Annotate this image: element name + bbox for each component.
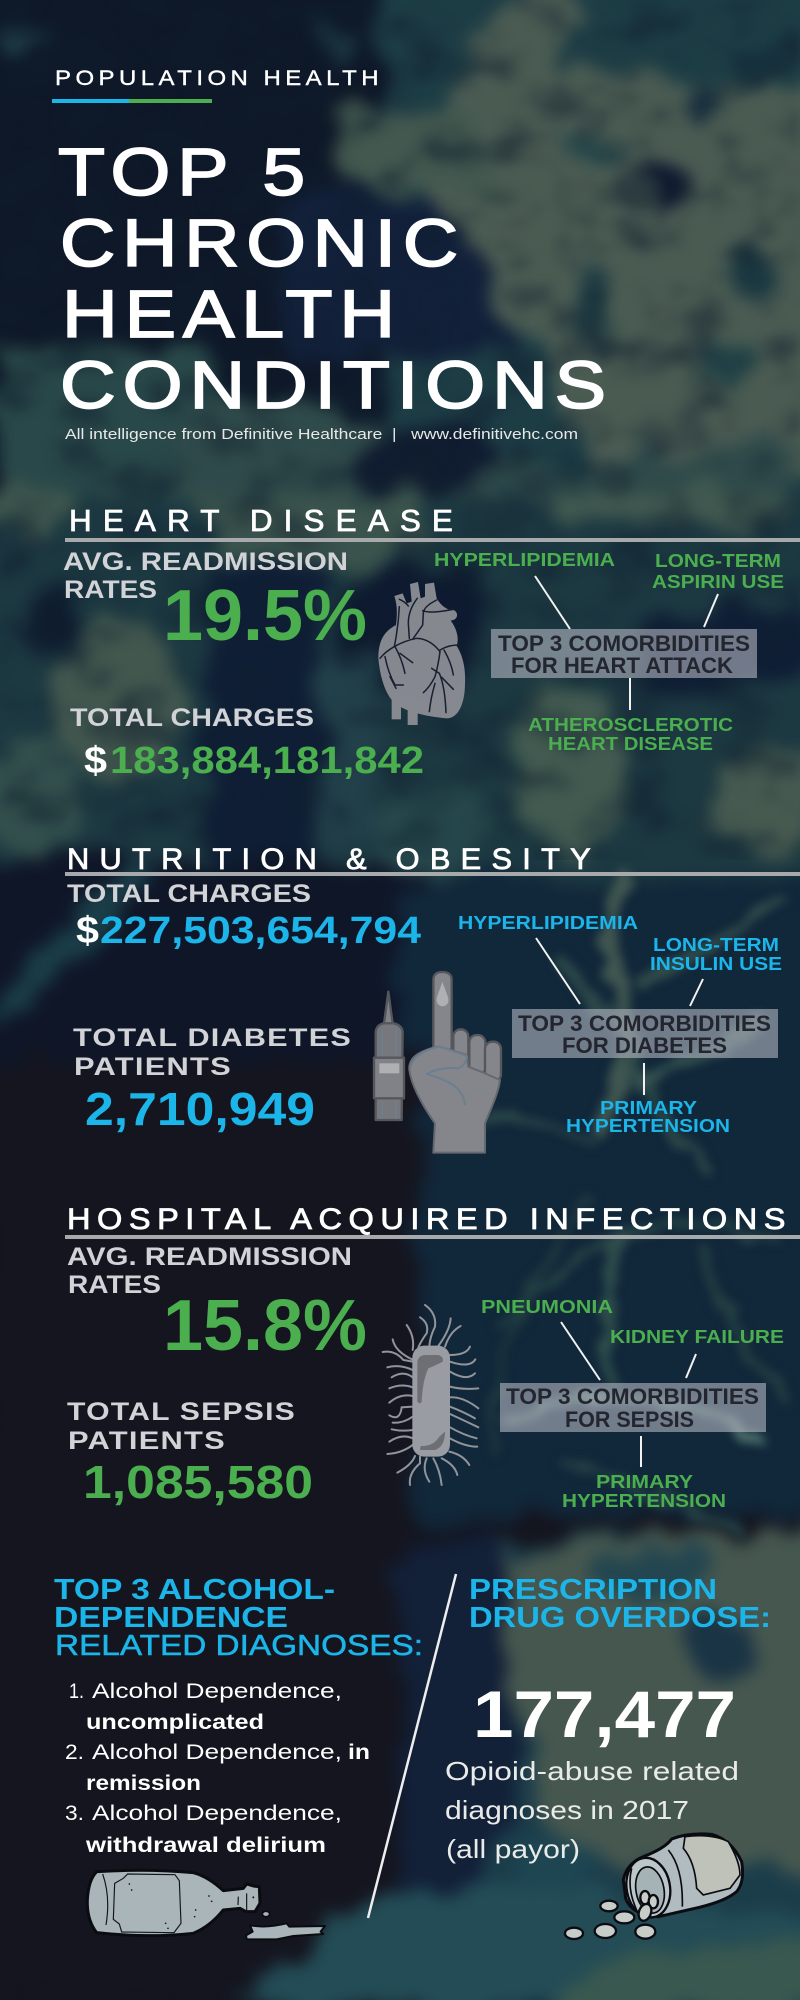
list: diagnoses: Alcohol Dependence,	[92, 1741, 342, 1764]
icon: bacterium	[383, 1305, 478, 1485]
comorbidity diagram: diabetes: HYPERLIPIDEMIA	[458, 912, 638, 933]
heading: nutrition and obesity: NUTRITION & OBESITY	[67, 843, 601, 876]
stat: total sepsis patients: TOTAL SEPSIS	[67, 1398, 296, 1426]
stat: total diabetes patients: 2,710,949	[85, 1083, 315, 1135]
comorbidity diagram: sepsis: PNEUMONIA	[481, 1296, 613, 1317]
title: CHRONIC	[60, 206, 465, 281]
top	[0, 0, 800, 1080]
list: diagnoses: 3.	[65, 1802, 84, 1825]
caption: opioid diagnoses: (all payor)	[446, 1834, 580, 1864]
comorbidity diagram: sepsis: FOR SEPSIS	[565, 1407, 694, 1432]
comorbidity diagram: sepsis: TOP 3 COMORBIDITIES	[506, 1384, 759, 1409]
list: diagnoses: 1.	[69, 1680, 84, 1703]
comorbidity diagram: sepsis: HYPERTENSION	[562, 1490, 726, 1511]
comorbidity diagram: diabetes	[458, 912, 782, 1136]
stat: total diabetes patients: TOTAL DIABETES	[73, 1024, 352, 1052]
comorbidity diagram: heart attack	[434, 549, 784, 754]
stat: total charges: TOTAL CHARGES	[70, 704, 314, 732]
list: diagnoses: withdrawal delirium	[85, 1834, 326, 1857]
comorbidity diagram: heart attack: ATHEROSCLEROTIC	[528, 714, 733, 735]
stat: average readmission rates: AVG. READMISSION	[63, 548, 348, 576]
stat: total charges: 227,503,654,794	[100, 910, 421, 952]
icon: spilled pill bottle	[565, 1834, 743, 1939]
caption: opioid diagnoses: Opioid-abuse related	[445, 1756, 739, 1786]
panel: prescription drug overdose	[445, 1574, 771, 1939]
stat: total diabetes patients: PATIENTS	[74, 1053, 232, 1081]
source line: All intelligence from Definitive Healthcare | www.definitivehc.com	[65, 427, 578, 443]
comorbidity diagram: diabetes: FOR DIABETES	[562, 1033, 727, 1058]
comorbidity diagram: heart attack: FOR HEART ATTACK	[511, 653, 733, 678]
stat: total charges: 183,884,181,842	[110, 740, 424, 782]
icon: heart	[378, 582, 465, 725]
panel: alcohol dependence	[54, 1574, 423, 1939]
heading: prescription drug overdose	[469, 1574, 771, 1634]
stat: total diabetes patients	[73, 1024, 352, 1135]
bottom right	[430, 1540, 800, 2000]
title: CONDITIONS	[60, 348, 613, 423]
heading: heart disease: HEART DISEASE	[69, 503, 464, 538]
list: diagnoses: uncomplicated	[86, 1711, 264, 1734]
caption: opioid diagnoses	[445, 1756, 739, 1864]
stat: total charges	[70, 704, 424, 782]
stat: average readmission rates: 19.5%	[163, 576, 367, 656]
list: diagnoses: Alcohol Dependence,	[92, 1680, 342, 1703]
comorbidity diagram: sepsis: PRIMARY	[596, 1471, 694, 1492]
kicker: population health: POPULATION HEALTH	[55, 66, 383, 90]
accent bar	[52, 99, 212, 103]
heading: alcohol dependence diagnoses	[54, 1574, 423, 1662]
list: diagnoses: in	[348, 1741, 370, 1764]
list: diagnoses: 2.	[65, 1741, 84, 1764]
caption: opioid diagnoses: diagnoses in 2017	[445, 1795, 689, 1825]
panel: hospital acquired infections	[65, 1203, 800, 1511]
stat: average readmission rates	[63, 548, 367, 656]
list: diagnoses: Alcohol Dependence,	[92, 1802, 342, 1825]
panel: nutrition and obesity	[65, 843, 800, 1153]
comorbidity diagram: diabetes: TOP 3 COMORBIDITIES	[518, 1011, 771, 1036]
heading: alcohol dependence diagnoses: DEPENDENCE	[54, 1602, 288, 1634]
comorbidity diagram: sepsis: KIDNEY FAILURE	[610, 1326, 784, 1347]
stat: total charges	[67, 880, 421, 952]
comorbidity diagram: diabetes: HYPERTENSION	[566, 1115, 730, 1136]
comorbidity diagram: diabetes: INSULIN USE	[650, 953, 782, 974]
heading: alcohol dependence diagnoses: TOP 3 ALCOHOL-	[54, 1574, 335, 1606]
stat: total charges: $	[76, 910, 99, 952]
comorbidity diagram: heart attack: TOP 3 COMORBIDITIES	[498, 631, 750, 656]
stat: total sepsis patients: 1,085,580	[83, 1456, 313, 1508]
icon: lancet and finger	[374, 972, 501, 1153]
stat: average readmission rates: RATES	[68, 1271, 161, 1299]
stat: total charges: $	[84, 740, 107, 782]
list: diagnoses	[65, 1680, 370, 1857]
stat: average readmission rates	[67, 1243, 367, 1366]
stat: average readmission rates: 15.8%	[163, 1286, 367, 1366]
icon: spilled bottle	[87, 1870, 325, 1939]
stat: total sepsis patients	[67, 1398, 313, 1508]
stat: total sepsis patients: PATIENTS	[68, 1427, 226, 1455]
panel: heart disease	[63, 503, 800, 782]
obesity section	[0, 860, 420, 1190]
list: diagnoses: remission	[86, 1772, 201, 1795]
stat: average readmission rates: AVG. READMISSION	[67, 1243, 352, 1271]
heading: alcohol dependence diagnoses: RELATED DIAGNOSES:	[55, 1630, 423, 1662]
comorbidity diagram: heart attack: HYPERLIPIDEMIA	[434, 549, 615, 570]
title	[58, 135, 613, 423]
heart section	[0, 500, 800, 880]
comorbidity diagram: heart attack: ASPIRIN USE	[652, 571, 784, 592]
comorbidity diagram: heart attack: LONG-TERM	[655, 550, 781, 571]
stat: total charges: TOTAL CHARGES	[67, 880, 311, 908]
stat: opioid diagnoses: 177,477	[473, 1677, 736, 1751]
stat: average readmission rates: RATES	[64, 576, 157, 604]
comorbidity diagram: diabetes: LONG-TERM	[653, 934, 779, 955]
title: HEALTH	[62, 277, 402, 352]
title: TOP 5	[58, 135, 312, 210]
comorbidity diagram: diabetes: PRIMARY	[600, 1097, 698, 1118]
divider line	[368, 1574, 456, 1918]
heading: prescription drug overdose: PRESCRIPTION	[469, 1574, 717, 1606]
heading: prescription drug overdose: DRUG OVERDOSE:	[469, 1602, 771, 1634]
heading: hospital acquired infections: HOSPITAL ACQUIRED INFECTIONS	[67, 1203, 792, 1236]
comorbidity diagram: sepsis	[481, 1296, 784, 1511]
comorbidity diagram: heart attack: HEART DISEASE	[548, 733, 713, 754]
